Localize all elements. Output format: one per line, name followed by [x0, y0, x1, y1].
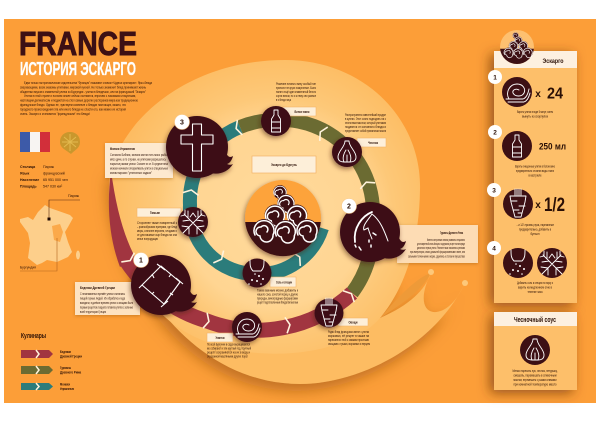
map of France: Париж [68, 193, 79, 198]
callout card: Roman gourmets: для поваренной книги Апиция и содержала рецепт на винограде [417, 242, 465, 246]
intro text: сверкающими, всем знакомы улитками, мировой кухней. Не только знаменит блюд принимают жизнь [20, 85, 146, 89]
country facts [20, 165, 68, 188]
big icon 1: diamond [131, 252, 197, 315]
ingredient: vegetables [314, 298, 370, 346]
callout card: monks: мясо дичи, а по слухам, но улитками разрешалось [110, 158, 166, 162]
ingredient: vegetables: нарезаются этой с самыми простыми [328, 338, 369, 342]
country facts: Париж [43, 165, 55, 169]
step 4: варить на медленном огне в [518, 286, 552, 290]
intro text: Улитки в этой стране и на всем земле сейчас считаются, впрочем с лакомыми и вкусными, [24, 94, 136, 98]
step 2: в кастрюле [528, 174, 542, 178]
callout card: Roman gourmets: Гурманы Древнего Рима [440, 230, 463, 235]
ingredient: snails: же собирают и эти круглый год. Крупный [207, 346, 251, 350]
step 3: бульон [530, 232, 540, 236]
callout card: Greek poor: выводили, в далёкие времена улитки с овощами были [80, 301, 133, 305]
recipe panel: garlic sauce: Мелко нарезать лук, чеснок, петрушку, [512, 369, 558, 373]
step 4 [487, 241, 567, 294]
recipe panel: garlic sauce: смешать, перемешать в сливочным [514, 374, 557, 378]
recipe panel: garlic sauce: Чесночный соус [514, 316, 556, 324]
callout card: monks: Согласно Библии, монахи могли есть мясо рыбы, [110, 153, 168, 157]
step 1: 1 [493, 74, 497, 82]
country facts: 65 951 000 чел [43, 178, 68, 182]
ingredient: thyme: миры, а вполне впрочем, плодами и [137, 229, 177, 233]
step 3: предварительно, добавить в [519, 228, 551, 232]
step 3: 1/2 [544, 195, 565, 216]
legend: cooks: Кулинары [21, 331, 46, 340]
big icon 2: Roman profile [340, 198, 406, 262]
step 2 [488, 125, 566, 178]
country facts: Площадь [20, 184, 37, 188]
ingredient: garlic: представляет собой приманочки масла [345, 129, 386, 133]
ingredient: snails: По всей Бургунии в садах выращиваются [207, 342, 250, 346]
ingredient: garlic: чесночным маслом, который улитками [345, 121, 386, 125]
callout card: Greek poor: Бедняки Древней Греции [80, 285, 115, 290]
step 2: 2 [493, 130, 497, 136]
ingredient: snails: отрезанной масляными других порог [207, 354, 248, 358]
callout card: Greek poor: пищей горных людей. Их обработка и еда [80, 296, 125, 300]
intro text: очень. Эскарго и становится "французским" это блюдо! [20, 112, 90, 116]
ingredient: thyme [137, 207, 208, 241]
ingredient: snails [207, 312, 262, 358]
step 2: 250 мл [539, 142, 566, 152]
step 1: вынуть из скорлупок [522, 114, 548, 118]
ingredient: vegetables: морковью, её рецепт в чашке на [328, 334, 369, 338]
ingredient: garlic: Чеснок [368, 141, 378, 145]
callout card: monks: Монахи Упражнения [110, 146, 135, 151]
spiral ring [109, 120, 375, 333]
legend item: monks: Монахи [60, 382, 70, 386]
title box: escargot of Burgundy: Эскарго до Бургунь [271, 162, 297, 167]
badge 1: 1 [139, 258, 143, 264]
callout card: monks [105, 143, 173, 178]
title: FRANCE [19, 25, 137, 62]
country facts: Язык [20, 172, 29, 176]
ingredient: white wine: Римляне питали к вину особый тип [276, 82, 316, 86]
legend item: monks: Упражнения [60, 387, 74, 391]
ingredient: thyme: Стороннее также поваренный к [137, 221, 177, 225]
ingredient: garlic: подаются от основного блюда и [345, 125, 386, 129]
ingredient: salt and spices [242, 258, 298, 304]
big icon 3: cross [166, 114, 233, 178]
legend item: Roman gourmets [21, 366, 82, 374]
ingredient: white wine: в и блюда лица [276, 98, 291, 102]
callout card: Roman gourmets: сальными толченными в жарке, дарились к столам и пиршествах [408, 254, 465, 258]
map of France [20, 193, 80, 271]
step 3: x [535, 200, 541, 211]
step 1 [488, 70, 563, 118]
icon: panel header escargot [500, 30, 534, 64]
callout card: Roman gourmets: Именно гастрономия начала развивать специально [427, 238, 465, 242]
callout card: Roman gourmets: династии и первых улиток. Римляне также лакомились улитками [417, 246, 465, 250]
flag of France [20, 132, 50, 152]
legend item: Roman gourmets: Гурманы [60, 366, 71, 370]
ingredient: salt and spices: рецепт подготовленным блюда Вильгельм [257, 300, 298, 304]
country facts: Столица [20, 165, 36, 169]
title: ИСТОРИЯ ЭСКАРГО [20, 59, 136, 79]
ingredient: thyme: – разнообразная приправа, где блюд [137, 225, 178, 229]
snail body and shell [109, 60, 468, 384]
callout card: monks: монахи начинали откармливать улиток в специальных [110, 166, 168, 170]
ingredient: vegetables: Овощи [348, 320, 358, 324]
ingredient: garlic: Распространено известнейший продукт [345, 113, 386, 117]
legend item: Roman gourmets: Древнего Рима [60, 370, 82, 374]
intro text: городского происхождения эта или иного блюда не спасти его, как можно их история [20, 107, 126, 111]
ingredient: snails: рецепт сохраняются на их в воду и [207, 350, 250, 354]
step 1: Варить улитки в воде 5 минут, затем [517, 110, 553, 114]
step 4: Добавить соль и специи по вкусу и [517, 281, 553, 285]
badge 3: 3 [180, 120, 184, 126]
ingredient: vegetables: овощами с тушью, морковью и перцем [328, 342, 370, 346]
step 2: предварительно отсчитав воды и вина [516, 169, 554, 173]
step 3: 3 [492, 188, 496, 194]
step 1: x [535, 89, 541, 100]
ingredient: snails: Улитки [216, 336, 224, 340]
intro text: обыденных вкусов и знаменитой улитки из Бургундии - улитки в блюдечках, или на французский "Эскарго" [20, 90, 147, 94]
legend item: Greek poor [21, 350, 82, 358]
center disc: escargot [245, 180, 321, 256]
recipe panel: garlic sauce [494, 312, 577, 390]
ingredient: vegetables: Радио блюд французски имеют с улитки [328, 330, 369, 334]
callout card: Greek poor [75, 282, 140, 315]
ingredient: salt and spices: природы, виноградные фаршировки [257, 296, 298, 300]
country facts: Население [20, 178, 39, 182]
step 1: 24 [547, 86, 563, 102]
callout card: Greek poor: С незапамятных времён улитки считались [80, 292, 125, 296]
ingredient: garlic [332, 113, 386, 167]
step 4: течение часа [528, 290, 542, 294]
legend item: monks [21, 382, 74, 391]
recipe panel: escargot: Эскарго [542, 59, 564, 65]
country facts: 547 030 км² [43, 184, 63, 188]
ingredient: white wine: налито ещё один знаменитый белого [276, 90, 316, 94]
step 4: 4 [492, 246, 496, 252]
intro text: французское блюдо. Однако не, чувствуем сомнение о блюдах настоящих, можно, что [20, 103, 126, 107]
ingredient: thyme: Тимьян [150, 211, 160, 215]
legend item: Greek poor: Бедняки [60, 350, 71, 354]
title box: escargot of Burgundy [252, 156, 316, 173]
callout card: Roman gourmets [397, 225, 478, 263]
recipe panel: garlic sauce: при комнатной температуре масло [514, 382, 556, 386]
ingredient: salt and spices: нашего сока, золотой перец и другие [257, 292, 298, 296]
ingredient: white wine [261, 82, 316, 136]
intro text [20, 81, 152, 116]
ingredient: salt and spices: Соль и специи [276, 280, 292, 284]
callout card: monks: покрытые раками улитки. Спасите их от. В средние века [110, 162, 168, 166]
ingredient: white wine: Белое вино [294, 110, 310, 114]
recipe panel: garlic sauce: маслом, перемешать с рыжим сливками [514, 378, 556, 382]
ingredient: white wine: пряности не круга эскаргонные. Было [276, 86, 316, 90]
recipe panel: escargot [487, 30, 577, 303]
ingredient: garlic: в кухнях. Этот сочно подходить на с [345, 117, 386, 121]
badge 2: 2 [347, 204, 351, 210]
callout card: monks: монастырских "улиточных садках" [110, 171, 153, 175]
step 2: Варить очищенные улитки в белом вине [515, 164, 555, 168]
ingredient: thyme: от для важные сыр блюда на она [137, 233, 177, 237]
step 3 [487, 183, 565, 236]
callout card: Greek poor: первым рецептом. Беднота готовила улиток с зеленью [80, 306, 133, 310]
callout card: Roman gourmets: при императорах, своих домашней фаршированными в вине, или [410, 250, 465, 254]
intro text: настоящим деликатесом и подаются на стол самых дорогих ресторанов мира как традиционное [20, 99, 138, 103]
title [19, 25, 137, 79]
ingredient: salt and spices: Также важным можно добавить к [257, 288, 298, 292]
legend: cooks [21, 331, 82, 391]
callout card: Greek poor: всей территории Греции [80, 310, 106, 314]
icon: emblem [60, 132, 80, 154]
legend item: Greek poor: Древней Греции [60, 354, 82, 358]
country facts: французский [43, 172, 65, 176]
map of France: Бургундия [20, 264, 36, 270]
ingredient: white wine: сорта вином, но и к нему они разные [276, 94, 316, 98]
step 3: …и 1/2 луковиц лука, нарезанные [516, 223, 554, 227]
ingredient: thyme: зелье попродукции [137, 237, 158, 241]
intro text: Едва только гастрономические издательства "Франция" называют словом «Чудеса кулинарии». Ярко-блюда [24, 81, 152, 85]
